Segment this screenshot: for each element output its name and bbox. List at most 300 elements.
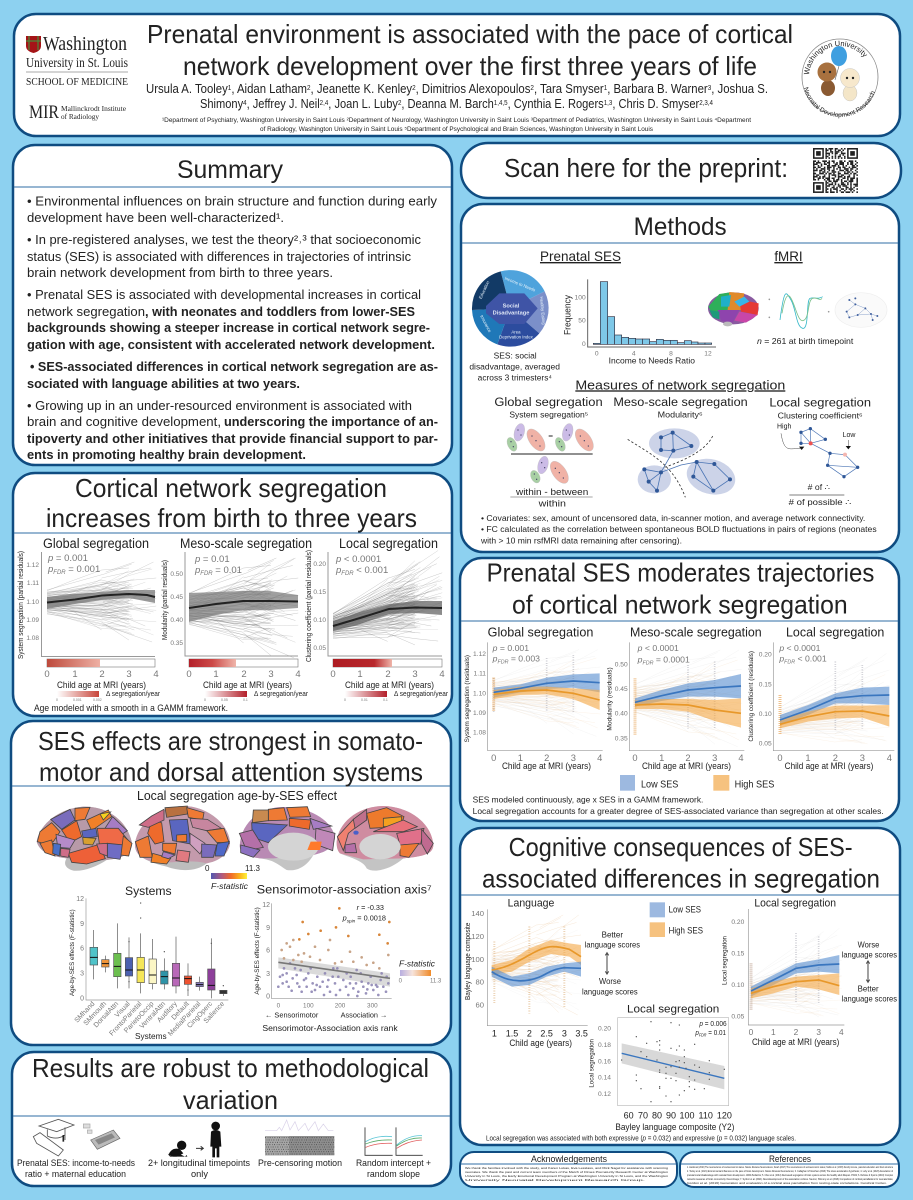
chart: meso-scale segregation trajectories: 0: [204, 698, 206, 702]
chart: meso-scale segregation trajectories: 0.05: [221, 698, 228, 702]
heading: cognitive consequences: associated differences in segregation: [482, 863, 880, 893]
chart: global segregation trajectories: 0: [56, 698, 58, 702]
chart: local segregation vs language composite scatter: 80: [652, 1111, 662, 1121]
logo: Washington University School of Medicine: SCHOOL OF MEDICINE: [26, 77, 128, 88]
chart: global segregation trajectories: 1.08: [26, 635, 39, 642]
column: global segregation: System segregation⁵: [509, 410, 588, 419]
chart: local segregation by age and language: Local segregation: [721, 936, 728, 985]
icon: crawling infant silhouette: [168, 1141, 187, 1157]
panel: cognitive consequences: [460, 828, 900, 1145]
panel: methods: [461, 204, 899, 552]
text: variation labels: Random intercept +: [356, 1158, 431, 1169]
chart: local segregation trajectories: 2: [385, 669, 391, 680]
annotation: better and worse language scores: Better: [602, 929, 623, 939]
text: covariates notes: • FC calculated as the correlation between spontaneous BOLD fluctuations in pairs of regions (neonates: [481, 524, 877, 534]
chart: global segregation trajectories: 1.11: [27, 580, 39, 587]
chart: local segregation trajectories: 0.20: [313, 561, 326, 568]
chart: systems box plot: VentralAttn: [139, 1001, 167, 1030]
chart: local segregation by SES: Clustering coefficient (residuals): [748, 651, 755, 742]
chart: local segregation by SES: 0.05: [759, 741, 772, 748]
text: SES definition: across 3 trimesters⁴: [478, 372, 552, 382]
title: network development over the first three years of life: [183, 51, 757, 81]
text: language scales note: Local segregation was associated with both expressive (p = 0.032) and expressive (p = 0.032) language scales.: [486, 1134, 796, 1143]
text block: summary bullets: sociated with language abilities at two years.: [27, 376, 300, 391]
chart: language trajectories: 100: [471, 955, 484, 964]
brain: left medial: [239, 807, 335, 870]
text block: summary bullets: status (SES) is associated with differences in trajectories of intrinsic: [27, 249, 411, 264]
chart: meso-scale segregation by SES: 4: [738, 753, 744, 763]
text: model notes: SES modeled continuously, age x SES in a GAMM framework.: [473, 794, 703, 804]
legend: low and high SES: [650, 902, 703, 937]
heading: summary: Summary: [177, 156, 283, 184]
chart: meso-scale segregation trajectories: 0: [186, 669, 192, 680]
icon: social disadvantage wheel: Social: [503, 303, 520, 309]
chart: local segregation by age and language: 2: [794, 1027, 799, 1037]
chart: local segregation trajectories: < 0.001: [354, 565, 388, 576]
heading: SES effects strongest: motor and dorsal attention systems: [39, 757, 423, 787]
chart: meso-scale segregation trajectories: 0.50: [170, 571, 183, 578]
chart: systems box plot: Default: [171, 1001, 191, 1022]
chart: global segregation by SES: 1.11: [474, 671, 486, 678]
icon: arrows between fMRI steps: [769, 299, 829, 317]
chart: sensorimotor-association axis scatter: 0: [266, 994, 270, 1001]
column: meso-scale segregation: Meso-scale segregation: [613, 395, 748, 409]
chart: global segregation trajectories: p = 0.001: [47, 553, 88, 564]
chart: global segregation trajectories: 4: [153, 669, 159, 680]
chart: sensorimotor-association axis scatter: 6: [266, 948, 270, 955]
title: Prenatal environment is associated with the pace of cortical: [147, 19, 793, 49]
heading: results robust: variation: [183, 1085, 278, 1115]
chart: local segregation trajectories: p < 0.0001: [335, 554, 381, 565]
text: references body: [687, 1165, 894, 1185]
panel: references: [680, 1152, 899, 1187]
chart: local segregation by age and language: Local segregation: [754, 898, 836, 910]
chart: language trajectories: 2: [527, 1029, 532, 1039]
chart: global segregation by SES: 2: [544, 753, 549, 763]
chart: meso-scale segregation trajectories: 1: [213, 669, 219, 680]
chart: local segregation by age and language: 0.20: [731, 919, 745, 926]
chart: meso-scale segregation trajectories: Δ segregation/year: [254, 691, 309, 698]
chart: sensorimotor-association axis scatter: 0: [277, 1003, 281, 1010]
chart: local segregation by age and language: 1: [771, 1027, 776, 1037]
text block: summary bullets: • Growing up in an under-resourced environment is associated with: [27, 398, 412, 413]
chart: systems box plot: Visual: [114, 1000, 132, 1019]
icon: social disadvantage wheel: Disadvantage: [493, 310, 529, 316]
text: model notes: [473, 794, 884, 816]
chart: systems box plot: SMhand: [74, 1001, 97, 1024]
chart: income to needs histogram: 0: [582, 341, 586, 348]
chart: global segregation by SES: 1.09: [473, 710, 486, 717]
chart: language trajectories: 2.5: [540, 1029, 553, 1039]
column: meso-scale segregation: [613, 395, 748, 500]
icon: social disadvantage wheel: Education: [478, 280, 491, 300]
chart: language trajectories: 80: [475, 978, 484, 987]
chart: systems box plot: 6: [80, 946, 84, 953]
chart: local segregation trajectories: 0.1: [383, 698, 388, 702]
chart: global segregation trajectories: Child age at MRI (years): [57, 680, 146, 691]
chart: language trajectories: 1.5: [506, 1029, 518, 1039]
icon: BOLD time series: [780, 294, 823, 328]
panel: title header: [12, 12, 902, 138]
icon: toddler silhouette: [210, 1122, 221, 1157]
chart: local segregation by SES: 0: [777, 753, 783, 763]
chart: local segregation by SES: 4: [887, 753, 892, 763]
heading: prenatal SES moderates: [487, 558, 874, 619]
chart: global segregation trajectories: Δ segregation/year: [106, 691, 161, 698]
legend: low and high SES: High SES: [669, 925, 703, 935]
column: local segregation: Clustering coefficient⁶: [778, 411, 863, 420]
heading: cognitive consequences: Cognitive consequences of SES-: [509, 832, 853, 862]
brain: right medial: [337, 806, 433, 871]
legend: low and high SES: Low SES: [641, 779, 679, 790]
chart: global segregation by SES: Child age at MRI (years): [502, 761, 591, 771]
chart: sensorimotor-association axis scatter: [254, 882, 442, 1033]
logo: Washington University School of Medicine: Washington: [43, 33, 127, 55]
column: local segregation: # of possible ∴: [789, 497, 852, 507]
chart: sensorimotor-association axis scatter: = 0.0018: [355, 914, 386, 923]
chart: systems box plot: 12: [76, 896, 84, 903]
legend: F-statistic colour bar: 11.3: [245, 864, 261, 873]
text: acknowledgements body: We thank the families involved with the study, and Karen Lukas, Eva Lesslass, and Rick Nagel for assistance with scanning: [465, 1166, 668, 1170]
chart: global segregation trajectories: 0.002: [93, 698, 102, 702]
text: references body: Gordon et al. (2016) Generation and evaluation of a cortical area parcellation from resting-state correlations. Cerebral Cortex.: [687, 1181, 887, 1185]
affiliations: of Radiology, Washington University in Saint Louis ⁵Department of Psychological and Brain Sciences, Washington University in Saint Louis: [260, 126, 653, 133]
chart: sensorimotor-association axis scatter: 9: [266, 925, 270, 932]
brain: left lateral: [37, 807, 132, 871]
chart: income to needs histogram: Income to Needs Ratio: [609, 355, 695, 365]
chart: sensorimotor-association axis scatter: 100: [303, 1003, 314, 1010]
chart: global segregation by SES: 0: [491, 753, 496, 763]
chart: meso-scale segregation trajectories: 2: [241, 669, 247, 680]
annotation: worse and better language scores: Worse: [858, 939, 879, 949]
chart: meso-scale segregation by SES: Modularity (residuals): [606, 667, 613, 731]
panel: summary: [13, 145, 452, 465]
chart: sensorimotor-association axis scatter: Association →: [341, 1010, 387, 1019]
heading: cortical network segregation: increases from birth to three years: [46, 503, 417, 533]
column: meso-scale segregation: Modularity⁶: [658, 410, 703, 419]
text: variation labels: Prenatal SES: income-to-needs: [17, 1158, 135, 1169]
chart: meso-scale segregation by SES: 0.45: [615, 686, 628, 693]
chart: meso-scale segregation by SES: 1: [659, 753, 664, 763]
chart: local segregation by age and language: 4: [839, 1027, 844, 1037]
chart: global segregation trajectories: FDR: [53, 570, 66, 576]
chart: local segregation trajectories: 3: [412, 669, 418, 680]
chart: global segregation by SES: p: [492, 654, 498, 664]
chart: language trajectories: Language: [508, 898, 554, 910]
chart: local segregation trajectories: 0.05: [313, 645, 326, 652]
chart: local segregation by SES: p: [778, 654, 784, 664]
panel: robust to methodological variation: [12, 1052, 451, 1186]
chart: global segregation trajectories: 0: [44, 669, 50, 680]
heading: cortical network segregation: [46, 473, 417, 533]
logo: Mallinckrodt Institute of Radiology: of Radiology: [61, 113, 100, 121]
heading: measures of network segregation: Measures of network segregation: [575, 377, 785, 392]
column: local segregation: [769, 396, 871, 507]
icon: social disadvantage wheel: Deprivation Index: [499, 335, 534, 340]
text: covariates notes: • Covariates: sex, amount of uncensored data, in-scanner motion, and average network connectivity.: [481, 513, 865, 523]
chart: sensorimotor-association axis scatter: ← Sensorimotor: [265, 1010, 319, 1019]
chart: meso-scale segregation trajectories: 3: [268, 669, 274, 680]
chart: local segregation vs language composite scatter: 0.12: [598, 1091, 611, 1098]
logo: Mallinckrodt Institute of Radiology: Mallinckrodt Institute: [61, 105, 126, 113]
chart: global segregation by SES: 1: [518, 753, 523, 763]
chart: local segregation trajectories: FDR: [341, 571, 354, 577]
chart: local segregation vs language composite scatter: FDR: [699, 1033, 707, 1038]
chart: local segregation trajectories: 0: [344, 698, 346, 702]
chart: local segregation by age and language: [721, 898, 844, 1047]
chart: systems box plot: Systems: [135, 1032, 167, 1041]
chart: local segregation vs language composite scatter: p: [694, 1028, 699, 1037]
chart: global segregation trajectories: p: [47, 564, 53, 575]
text block: summary bullets: ents in promoting healthy brain development.: [27, 447, 306, 462]
chart: meso-scale segregation by SES: 2: [685, 753, 691, 763]
chart: systems box plot: Systems: [125, 884, 172, 898]
text block: summary bullets: [27, 194, 438, 462]
chart: global segregation trajectories: [18, 536, 161, 702]
chart: global segregation by SES: 1.12: [473, 651, 486, 658]
chart: sensorimotor-association axis scatter: 200: [335, 1003, 346, 1010]
chart: meso-scale segregation trajectories: = 0.01: [213, 565, 242, 576]
icon: calculator and money: [83, 1124, 120, 1149]
chart: sensorimotor-association axis scatter: r = -0.33: [357, 903, 384, 912]
legend: F-statistic colour bar: 0: [205, 864, 210, 873]
chart: meso-scale segregation by SES: [606, 626, 762, 771]
chart: global segregation trajectories: 1: [72, 669, 78, 680]
chart: systems box plot: ParietoOccip: [123, 1001, 156, 1035]
annotation: worse and better language scores: language scores: [842, 994, 898, 1004]
heading: references: References: [769, 1154, 811, 1164]
chart: language trajectories: 140: [471, 909, 484, 918]
chart: income to needs histogram: 100: [575, 294, 586, 301]
heading: SES effects strongest: SES effects are strongest in somato-: [38, 726, 423, 756]
chart: income to needs histogram: 4: [632, 351, 636, 358]
text block: summary bullets: underscoring the importance of an-: [224, 414, 438, 429]
text: acknowledgements body: University in St Louis, the Early Emotional Development Program at Washington University in St Louis, and the Washington: [465, 1174, 668, 1178]
text block: summary bullets: • In pre-registered analyses, we test the theory²˒³ that socioeconomic: [27, 232, 421, 247]
chart: meso-scale segregation by SES: 0.50: [615, 662, 628, 669]
chart: systems box plot: 9: [80, 921, 84, 928]
text: model notes: Local segregation accounts for a greater degree of SES-associated variance than segregation at other scales.: [473, 806, 884, 816]
chart: systems box plot: SMmouth: [83, 1001, 108, 1027]
chart: meso-scale segregation trajectories: p: [194, 565, 200, 576]
heading: results robust: Results are robust to methodological: [32, 1053, 429, 1083]
chart: global segregation by SES: System segregation (residuals): [464, 655, 471, 742]
column: local segregation: High: [777, 424, 791, 431]
chart: local segregation by SES: 0.10: [759, 711, 772, 718]
chart: local segregation by SES: Child age at MRI (years): [785, 761, 873, 771]
icon: parcellated brain: [708, 292, 759, 326]
icon: arrow from infant to toddler: [196, 1146, 203, 1150]
text: variation labels: [17, 1158, 431, 1180]
text block: summary bullets: gation with age, consistent with accelerated network development.: [27, 337, 435, 352]
panel: SES effects by system: [11, 721, 451, 1045]
chart: global segregation trajectories: 0.001: [73, 698, 82, 702]
column: global segregation: within: [537, 499, 566, 509]
chart: local segregation vs language composite scatter: Local segregation: [588, 1039, 595, 1088]
icon: social disadvantage wheel: Healthy Eating: [539, 296, 546, 325]
logo: Washington University School of Medicine: [26, 33, 128, 88]
chart: global segregation by SES: [464, 626, 603, 771]
chart: local segregation by SES: 3: [860, 753, 865, 763]
chart: local segregation vs language composite scatter: = 0.01: [707, 1028, 726, 1037]
chart: local segregation vs language composite scatter: Local segregation: [627, 1004, 719, 1016]
heading: prenatal SES moderates: of cortical network segregation: [512, 589, 848, 619]
affiliations: ¹Department of Psychiatry, Washington University in Saint Louis ²Department of Neurology, Washington University in Saint Louis ³Department of Pediatrics, Washington University in Saint Louis ⁴Department: [162, 117, 751, 124]
title: [147, 19, 793, 81]
heading: prenatal SES: Prenatal SES: [540, 248, 621, 264]
authors: Ursula A. Tooley1, Aidan Latham2, Jeanette K. Kenley2, Dimitrios Alexopoulos2, Tara Smyser1, Barbara B. Warner3, Joshua S.: [146, 82, 768, 96]
chart: systems box plot: Auditory: [156, 1000, 179, 1024]
annotation: worse and better language scores: Better: [858, 983, 879, 993]
chart: local segregation vs language composite scatter: 100: [679, 1111, 694, 1121]
chart: local segregation trajectories: 0.01: [361, 698, 368, 702]
heading: local segregation effect: Local segregation age-by-SES effect: [137, 788, 337, 803]
column: local segregation: Low: [843, 432, 856, 439]
chart: sensorimotor-association axis scatter: Sensorimotor-Association axis rank: [262, 1023, 399, 1033]
chart: local segregation trajectories: Child age at MRI (years): [345, 680, 434, 691]
chart: meso-scale segregation by SES: FDR: [642, 660, 654, 666]
chart: language trajectories: 3: [562, 1029, 567, 1039]
text block: summary bullets: • Prenatal SES is associated with developmental increases in cortical: [27, 287, 421, 302]
chart: systems box plot: FrontoParietal: [108, 1000, 144, 1037]
chart: income to needs histogram: Frequency: [562, 295, 572, 335]
chart: meso-scale segregation trajectories: Child age at MRI (years): [203, 680, 292, 691]
chart: meso-scale segregation by SES: 0.35: [615, 735, 628, 742]
chart: meso-scale segregation by SES: 0.40: [615, 711, 628, 718]
chart: local segregation trajectories: Local segregation: [339, 536, 438, 551]
chart: global segregation by SES: 1.10: [473, 690, 486, 697]
heading: cortical network segregation: Cortical network segregation: [75, 473, 387, 503]
annotation: better and worse language scores: language scores: [585, 940, 641, 950]
chart: local segregation vs language composite scatter: 60: [624, 1111, 634, 1121]
annotation: better and worse language scores: language scores: [582, 986, 638, 996]
chart: systems box plot: CingOperc: [186, 1000, 214, 1030]
chart: language trajectories: Bayley language composite: [463, 923, 472, 1000]
chart: local segregation vs language composite scatter: 0.18: [598, 1042, 611, 1049]
icon: social disadvantage wheel: Insurance: [479, 314, 493, 334]
chart: local segregation by age and language: Child age at MRI (years): [752, 1037, 839, 1047]
chart: local segregation by SES: 2: [833, 753, 838, 763]
chart: global segregation by SES: 4: [597, 753, 602, 763]
icon: motion spikes and noise grid: [265, 1120, 334, 1155]
chart: income to needs histogram: 12: [704, 351, 712, 358]
chart: local segregation vs language composite scatter: 0.14: [598, 1075, 611, 1082]
chart: systems box plot: MedialParietal: [167, 1000, 203, 1038]
chart: meso-scale segregation by SES: p: [637, 654, 643, 664]
chart: local segregation by age and language: 0.10: [731, 982, 745, 989]
chart: sensorimotor-association axis scatter: 12: [262, 902, 270, 909]
chart: local segregation by SES: Local segregation: [786, 626, 884, 640]
chart: local segregation vs language composite scatter: 70: [638, 1111, 648, 1121]
chart: meso-scale segregation trajectories: [162, 536, 312, 702]
chart: global segregation by SES: p = 0.001: [492, 643, 529, 653]
chart: income to needs histogram: 8: [669, 351, 673, 358]
heading: methods: Methods: [634, 214, 727, 241]
chart: local segregation trajectories: Clustering coefficient (partial residuals): [306, 550, 313, 662]
chart: meso-scale segregation trajectories: 0.35: [170, 640, 183, 647]
chart: language trajectories: Child age (years): [509, 1038, 572, 1048]
chart: local segregation vs language composite scatter: 120: [717, 1111, 732, 1121]
chart: systems box plot: Salience: [203, 1001, 226, 1025]
chart: global segregation by SES: FDR: [497, 660, 509, 666]
chart: global segregation trajectories: 1.10: [26, 599, 39, 606]
chart: local segregation by age and language: 0.05: [731, 1013, 745, 1020]
chart: local segregation trajectories: [306, 536, 449, 702]
icon: brain network graph: [835, 293, 887, 327]
column: global segregation: [494, 395, 603, 509]
legend: F-statistic colour bar: F-statistic: [211, 882, 248, 891]
chart: global segregation trajectories: = 0.001: [66, 564, 100, 575]
chart: global segregation by SES: = 0.003: [508, 654, 540, 664]
panel: cortical network segregation increases: [13, 473, 452, 716]
panel: scan for preprint: [461, 143, 901, 198]
chart: local segregation by SES: p < 0.0001: [778, 643, 821, 653]
heading: SES effects strongest: [38, 726, 423, 787]
chart: local segregation vs language composite scatter: [588, 1004, 734, 1132]
chart: income to needs histogram: [562, 279, 716, 365]
chart: local segregation by age and language: 3: [816, 1027, 821, 1037]
icon: social disadvantage wheel: Area: [511, 329, 521, 334]
text block: summary bullets: brain and cognitive development,: [27, 414, 221, 429]
chart: sensorimotor-association axis scatter: 0: [399, 978, 403, 984]
chart: global segregation by SES: 1.08: [473, 730, 486, 737]
text: variation labels: only: [191, 1169, 208, 1180]
chart: language trajectories: 120: [471, 932, 484, 941]
chart: global segregation trajectories: 3: [126, 669, 132, 680]
chart: global segregation by SES: Global segregation: [488, 626, 593, 640]
chart: meso-scale segregation by SES: 0: [632, 753, 638, 763]
text: SES definition: SES: social: [494, 350, 537, 360]
chart: local segregation by SES: 0.20: [759, 652, 772, 659]
chart: local segregation trajectories: 0.15: [313, 589, 326, 596]
icon: graduation cap and diploma: [33, 1119, 74, 1156]
chart: meso-scale segregation trajectories: FDR: [200, 571, 213, 577]
chart: local segregation vs language composite scatter: 0.16: [598, 1058, 611, 1065]
chart: local segregation by SES: < 0.001: [795, 654, 827, 664]
QR code: [813, 149, 858, 192]
chart: meso-scale segregation by SES: Meso-scale segregation: [630, 626, 762, 640]
chart: meso-scale segregation trajectories: Modularity (partial residuals): [162, 560, 169, 640]
logo: Mallinckrodt Institute of Radiology: MIR: [29, 102, 59, 123]
brain: right lateral: [135, 806, 230, 870]
text: covariates notes: with > 10 min rsfMRI data remaining after censoring).: [480, 535, 682, 545]
chart: meso-scale segregation by SES: 3: [712, 753, 717, 763]
chart: sensorimotor-association axis scatter: Age-by-SES effects (F-statistic): [254, 907, 261, 995]
logo: Neonatal Development Research: Washington University: [804, 40, 868, 74]
text block: summary bullets: • Environmental influences on brain structure and function during early: [27, 194, 438, 208]
heading: cognitive consequences: [482, 832, 880, 893]
heading: fMRI: fMRI: [774, 248, 803, 264]
chart: meso-scale segregation trajectories: Meso-scale segregation: [180, 536, 312, 551]
chart: income to needs histogram: 0: [595, 351, 599, 358]
column: global segregation: Global segregation: [494, 395, 603, 409]
text: acknowledgements body: University Neonatal Development Research Group.: [465, 1178, 645, 1182]
chart: global segregation trajectories: System segregation (partial residuals): [18, 551, 25, 659]
column: global segregation: within - between: [515, 487, 588, 497]
chart: local segregation trajectories: Δ segregation/year: [394, 691, 449, 698]
chart: local segregation trajectories: 0.10: [313, 617, 326, 624]
text block: summary bullets: , with neonates and toddlers from lower-SES: [145, 304, 415, 319]
authors: [146, 82, 768, 111]
chart: systems box plot: 3: [80, 970, 84, 977]
column: local segregation: Local segregation: [769, 396, 871, 410]
panel: prenatal SES moderates trajectories: [460, 558, 899, 821]
text: covariates notes: [480, 513, 877, 545]
icon: social disadvantage wheel: [472, 270, 549, 347]
chart: systems box plot: 0: [80, 995, 84, 1002]
legend: F-statistic colour bar: [205, 864, 261, 891]
logo: Washington University School of Medicine: University in St. Louis: [26, 56, 128, 71]
